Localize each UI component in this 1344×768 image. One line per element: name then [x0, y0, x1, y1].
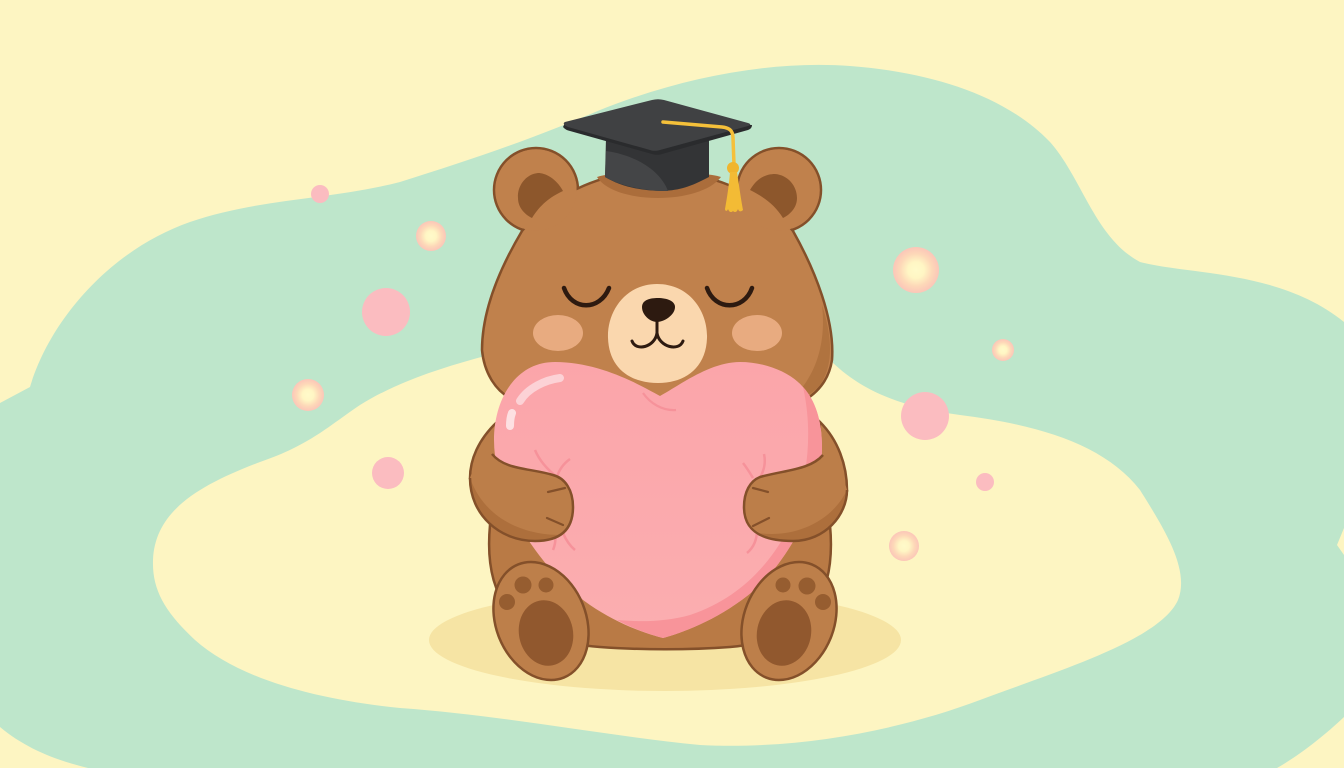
nose: [642, 298, 675, 322]
claws: [753, 488, 769, 526]
left eye: [564, 288, 609, 305]
tassel knob: [727, 162, 739, 174]
right ear outline: [737, 148, 821, 232]
bubble: [889, 531, 919, 561]
cap shadow on head: [597, 172, 721, 198]
cap base highlight: [605, 151, 668, 191]
left cheek: [533, 315, 583, 351]
bubble: [362, 288, 410, 336]
background: inner cream blob: [153, 352, 1181, 746]
heart small highlight: [510, 413, 512, 426]
right foot: [724, 548, 854, 694]
arm shade: [470, 478, 560, 541]
arm outline: [470, 454, 573, 541]
tassel: [725, 172, 743, 212]
left foot: [476, 548, 606, 694]
toe: [538, 578, 554, 592]
pad: [751, 595, 817, 671]
muzzle: [608, 284, 707, 383]
left ear outline: [494, 148, 578, 232]
tassel cord: [663, 122, 734, 165]
bubble: [416, 221, 446, 251]
heart right and bottom shade: [617, 387, 822, 638]
graduation cap: [563, 99, 752, 212]
heart highlight: [520, 378, 560, 401]
right arm: [744, 450, 847, 541]
left wrinkles: [535, 450, 575, 550]
heart centre crease: [643, 393, 676, 410]
toe: [514, 576, 532, 594]
cap base: [605, 138, 709, 191]
head: [482, 171, 832, 400]
bubble: [976, 473, 994, 491]
bubble: [992, 339, 1014, 361]
heart pillow: [494, 362, 822, 638]
right eye: [707, 288, 752, 305]
toe: [815, 594, 831, 610]
bubble: [893, 247, 939, 293]
right ear inner: [750, 174, 797, 218]
pad: [513, 595, 579, 671]
left arm: [470, 450, 573, 541]
right arm back: [815, 422, 847, 490]
mortarboard: [564, 99, 750, 151]
body: [489, 525, 831, 649]
right cheek: [732, 315, 782, 351]
bubble: [901, 392, 949, 440]
bubble: [311, 185, 329, 203]
floating bubbles: [292, 185, 1014, 561]
bear: [482, 148, 832, 649]
claws: [547, 488, 565, 525]
toe: [798, 578, 816, 594]
mortarboard lower edge: [563, 123, 752, 155]
bubble: [372, 457, 404, 489]
bubble: [292, 379, 324, 411]
left ear blend: [495, 149, 577, 231]
arm shade: [758, 490, 847, 541]
toe: [776, 578, 790, 592]
mouth: [632, 321, 683, 347]
head shading: [795, 305, 830, 397]
left arm back: [470, 422, 500, 478]
right ear blend: [738, 149, 820, 231]
arm outline: [744, 455, 847, 541]
right wrinkles: [743, 454, 765, 553]
left ear inner: [518, 173, 563, 218]
ground shadow: [429, 589, 901, 691]
toe: [499, 594, 515, 610]
